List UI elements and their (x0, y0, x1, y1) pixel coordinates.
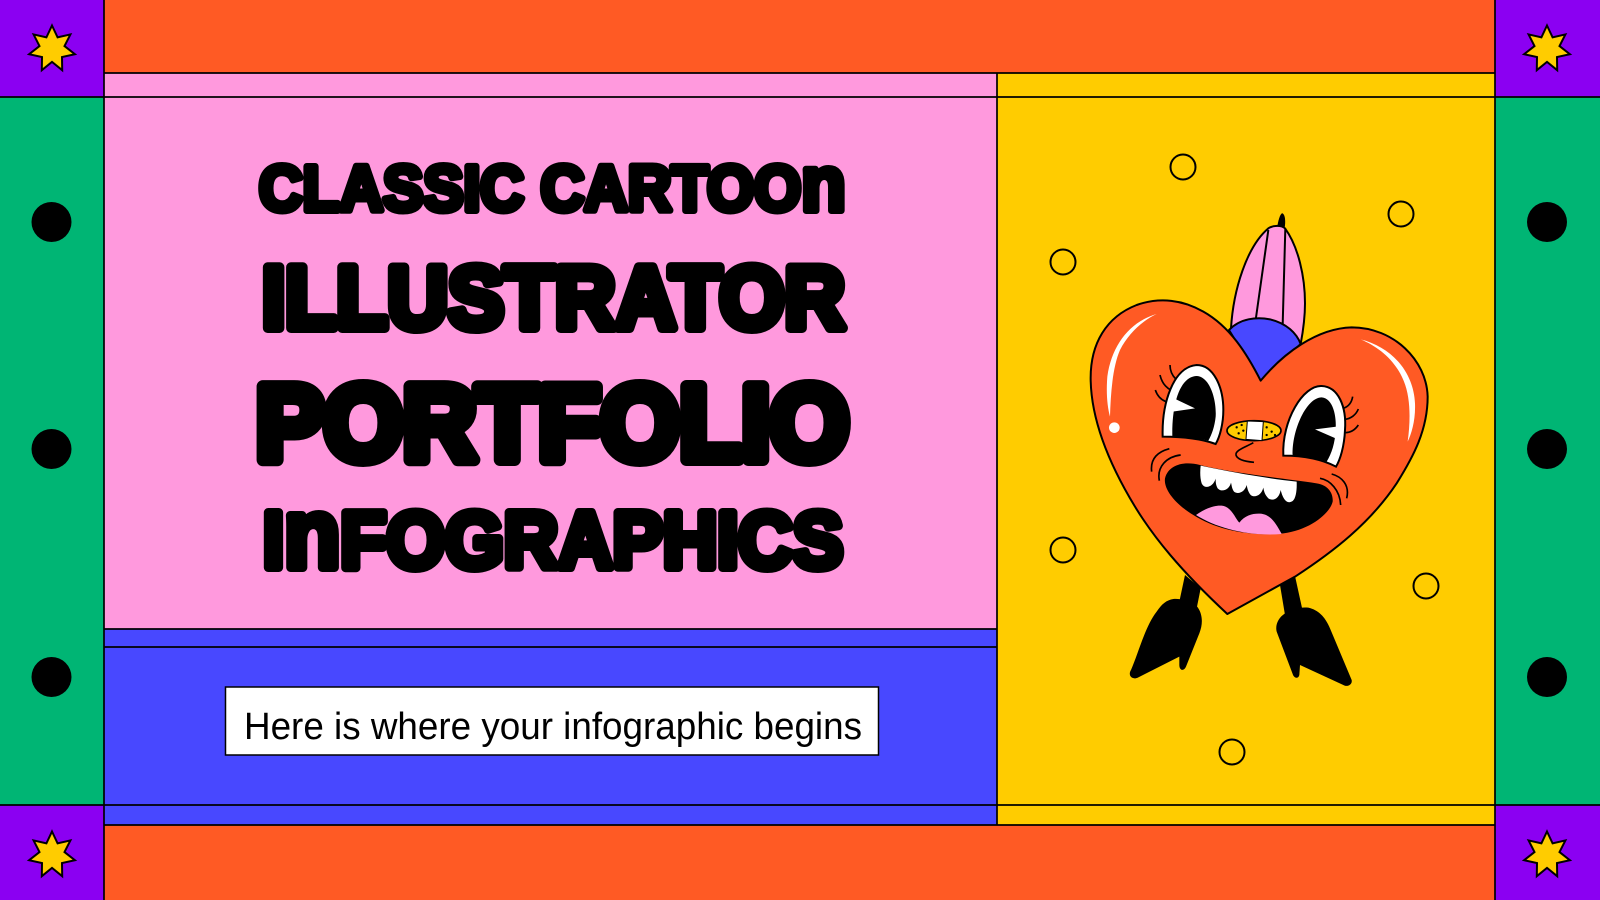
panel: bottom-left purple corner (0, 805, 104, 900)
panel: left green column (0, 97, 104, 805)
nose bandage and nose (1227, 421, 1281, 462)
icon: bottom-right star (1524, 832, 1570, 876)
panel: top-right purple corner (1495, 0, 1600, 97)
panel: pink title area (104, 73, 997, 629)
panel: blue subtitle area (104, 629, 997, 825)
panel: yellow illustration area (997, 73, 1495, 825)
mouth with teeth and tongue (1151, 449, 1347, 534)
panel: right green column (1495, 97, 1600, 805)
icon: top-left star (29, 26, 75, 70)
panel: bottom orange band (104, 825, 1496, 900)
left column dots (32, 202, 72, 697)
title: PORTFOLIO (256, 364, 849, 482)
left eye (1155, 365, 1223, 444)
title: CLASSIC CARTOOn (259, 140, 846, 228)
subtitle box: Here is where your infographic begins (244, 706, 862, 748)
subtitle box (226, 687, 878, 755)
decorative bubbles (1050, 154, 1438, 764)
panel: top-left purple corner (0, 0, 104, 97)
title: InFOGRAPHICS (263, 478, 843, 588)
character legs and shoes (1130, 575, 1352, 686)
panel: top orange band (104, 0, 1496, 73)
right eye (1283, 386, 1358, 467)
title (256, 140, 849, 588)
heart body (1091, 300, 1428, 614)
title: ILLUSTRATOR (262, 248, 845, 347)
hat (1229, 213, 1305, 382)
right column dots (1527, 202, 1567, 697)
heart character illustration (1091, 213, 1428, 686)
panel: bottom-right purple corner (1495, 805, 1600, 900)
icon: bottom-left star (29, 832, 75, 876)
heart highlights (1107, 314, 1415, 442)
icon: top-right star (1524, 26, 1570, 70)
